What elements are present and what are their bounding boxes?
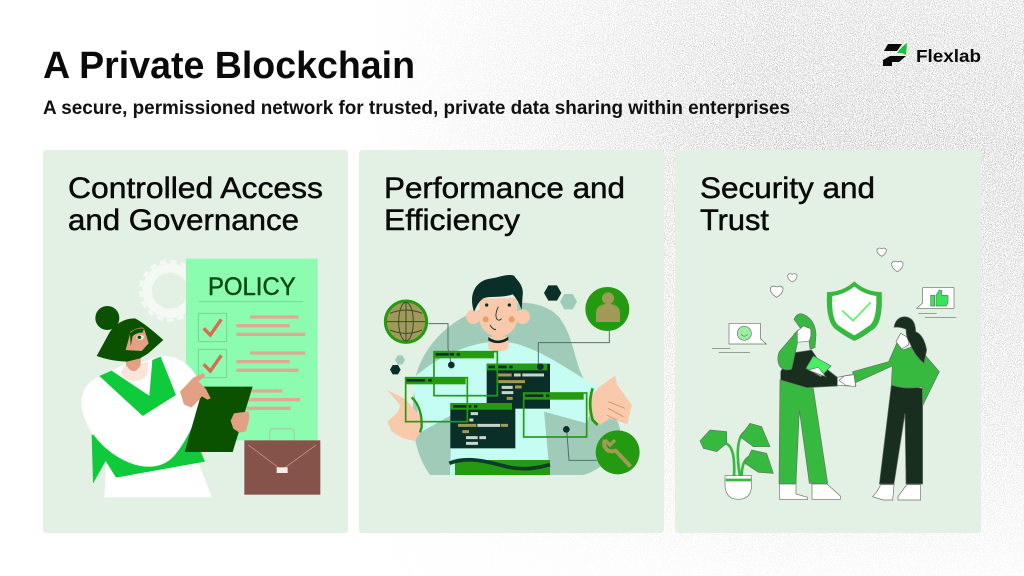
policy document xyxy=(186,259,318,440)
heading: Performance and Efficiency: Efficiency xyxy=(384,204,520,237)
panel: Performance and Efficiency xyxy=(359,150,664,533)
speech bubble: smiley xyxy=(712,323,766,353)
connectors xyxy=(428,324,609,460)
illustration: handshake with shield xyxy=(700,248,956,500)
outline window 3 xyxy=(524,393,587,437)
logo: Flexlab xyxy=(883,43,981,66)
heading: Performance and Efficiency: Performance and xyxy=(384,172,625,205)
plant xyxy=(700,423,773,499)
code window 1 xyxy=(487,364,550,409)
developer xyxy=(387,275,632,475)
hexagons xyxy=(390,285,577,374)
heading: Controlled Access and Governance: Controlled Access xyxy=(68,172,323,205)
icon: wrench xyxy=(596,430,640,474)
speech bubble: thumbs up xyxy=(917,288,956,317)
title: A Private Blockchain xyxy=(43,45,415,87)
illustration: developer with code windows xyxy=(385,275,640,475)
heading: Security and Trust: Security and xyxy=(700,172,875,205)
subtitle: A secure, permissioned network for trusted, private data sharing within enterprises xyxy=(43,97,790,119)
code window 2 xyxy=(450,403,515,448)
icon: globe xyxy=(385,301,427,342)
briefcase xyxy=(244,429,320,495)
background texture xyxy=(417,0,1024,576)
outline window 1 xyxy=(434,352,497,396)
panel: Controlled Access and Governance xyxy=(43,150,348,533)
policy document: POLICY xyxy=(208,273,296,301)
icon: shield xyxy=(827,281,882,341)
icon: person xyxy=(585,287,629,331)
right woman xyxy=(839,317,939,500)
illustration: policy and woman xyxy=(81,259,320,497)
icon: hearts xyxy=(770,248,903,297)
icon: gear xyxy=(141,261,199,320)
backdrop blob xyxy=(413,303,620,475)
panel: Security and Trust xyxy=(675,150,981,533)
outline window 2 xyxy=(406,378,467,422)
heading: Security and Trust: Trust xyxy=(700,204,770,237)
woman holding clipboard xyxy=(81,306,253,497)
icon: Flexlab mark xyxy=(883,43,907,66)
logo wordmark: Flexlab xyxy=(916,46,981,66)
heading: Controlled Access and Governance: and Governance xyxy=(68,204,299,237)
left woman xyxy=(778,314,856,499)
